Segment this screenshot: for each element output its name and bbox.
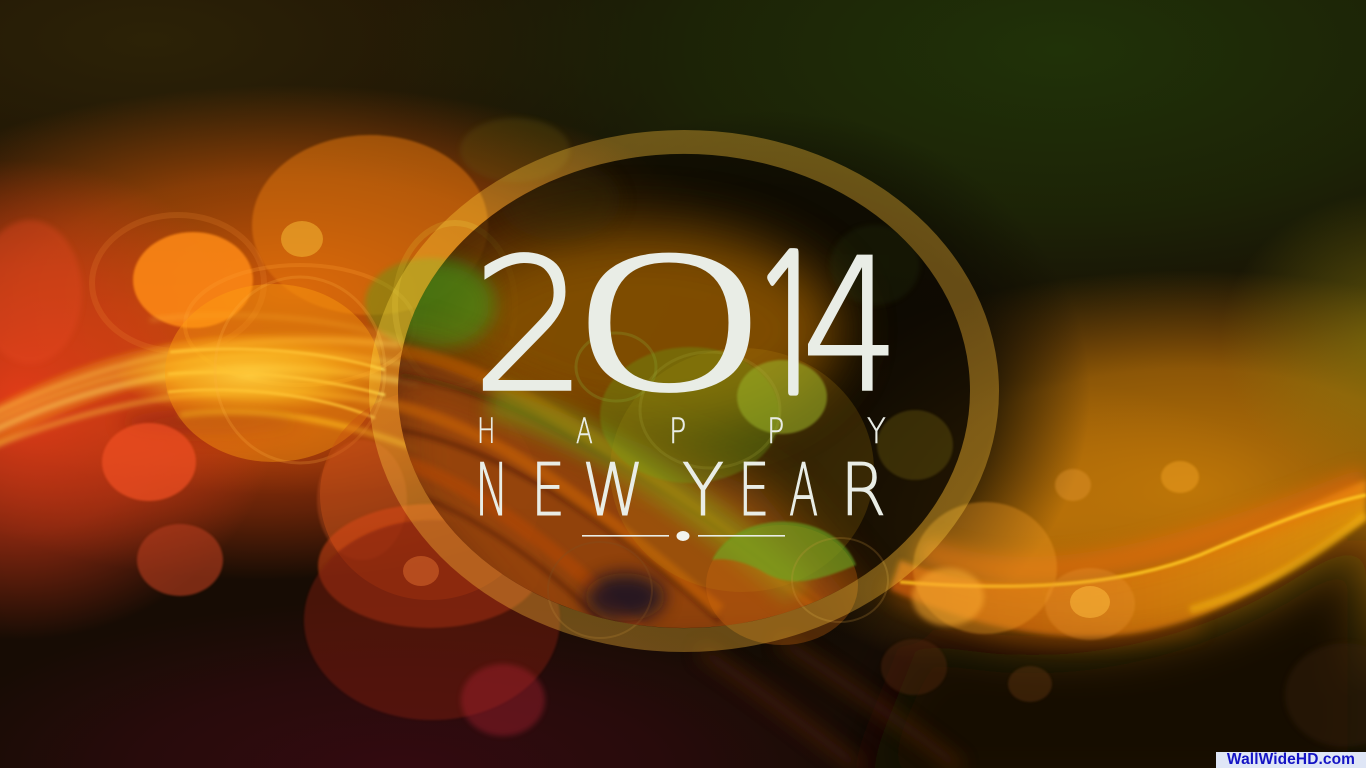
- subtitle: HAPPY: A: [576, 412, 593, 452]
- subtitle: NEW YEAR: A: [789, 449, 818, 533]
- subtitle: NEW YEAR: W: [582, 449, 644, 533]
- subtitle: NEW YEAR: N: [475, 449, 509, 533]
- green bubble at ellipse base: [548, 522, 888, 645]
- left wave: [0, 315, 420, 452]
- shadow around central ellipse: [450, 110, 1090, 680]
- right bokeh: [881, 461, 1366, 747]
- title: 2014: 2: [472, 220, 588, 432]
- title: 2014: 1: [749, 228, 829, 423]
- subtitle: NEW YEAR: R: [840, 449, 886, 533]
- subtitle: HAPPY: P: [767, 412, 784, 452]
- subtitle: NEW YEAR: Y: [682, 449, 724, 533]
- subtitle: HAPPY: P: [669, 412, 686, 452]
- subtitle: NEW YEAR: E: [531, 449, 565, 533]
- title: 2014: 0: [560, 220, 780, 432]
- left bokeh: [0, 135, 515, 387]
- lower streaks: [700, 640, 960, 768]
- watermark: WallWideHD.com: [1227, 751, 1355, 768]
- subtitle: HAPPY: Y: [867, 412, 886, 452]
- title: 2014: 4: [802, 220, 899, 432]
- subtitle: HAPPY: H: [477, 412, 495, 452]
- central ellipse ring: [369, 130, 999, 652]
- subtitle: NEW YEAR: E: [738, 449, 770, 533]
- dark lower right zone: [860, 525, 1366, 768]
- ornament line and dot: [582, 531, 785, 541]
- central ellipse interior: [398, 154, 970, 628]
- large left bubbles: [102, 118, 570, 736]
- right wave: [890, 480, 1366, 638]
